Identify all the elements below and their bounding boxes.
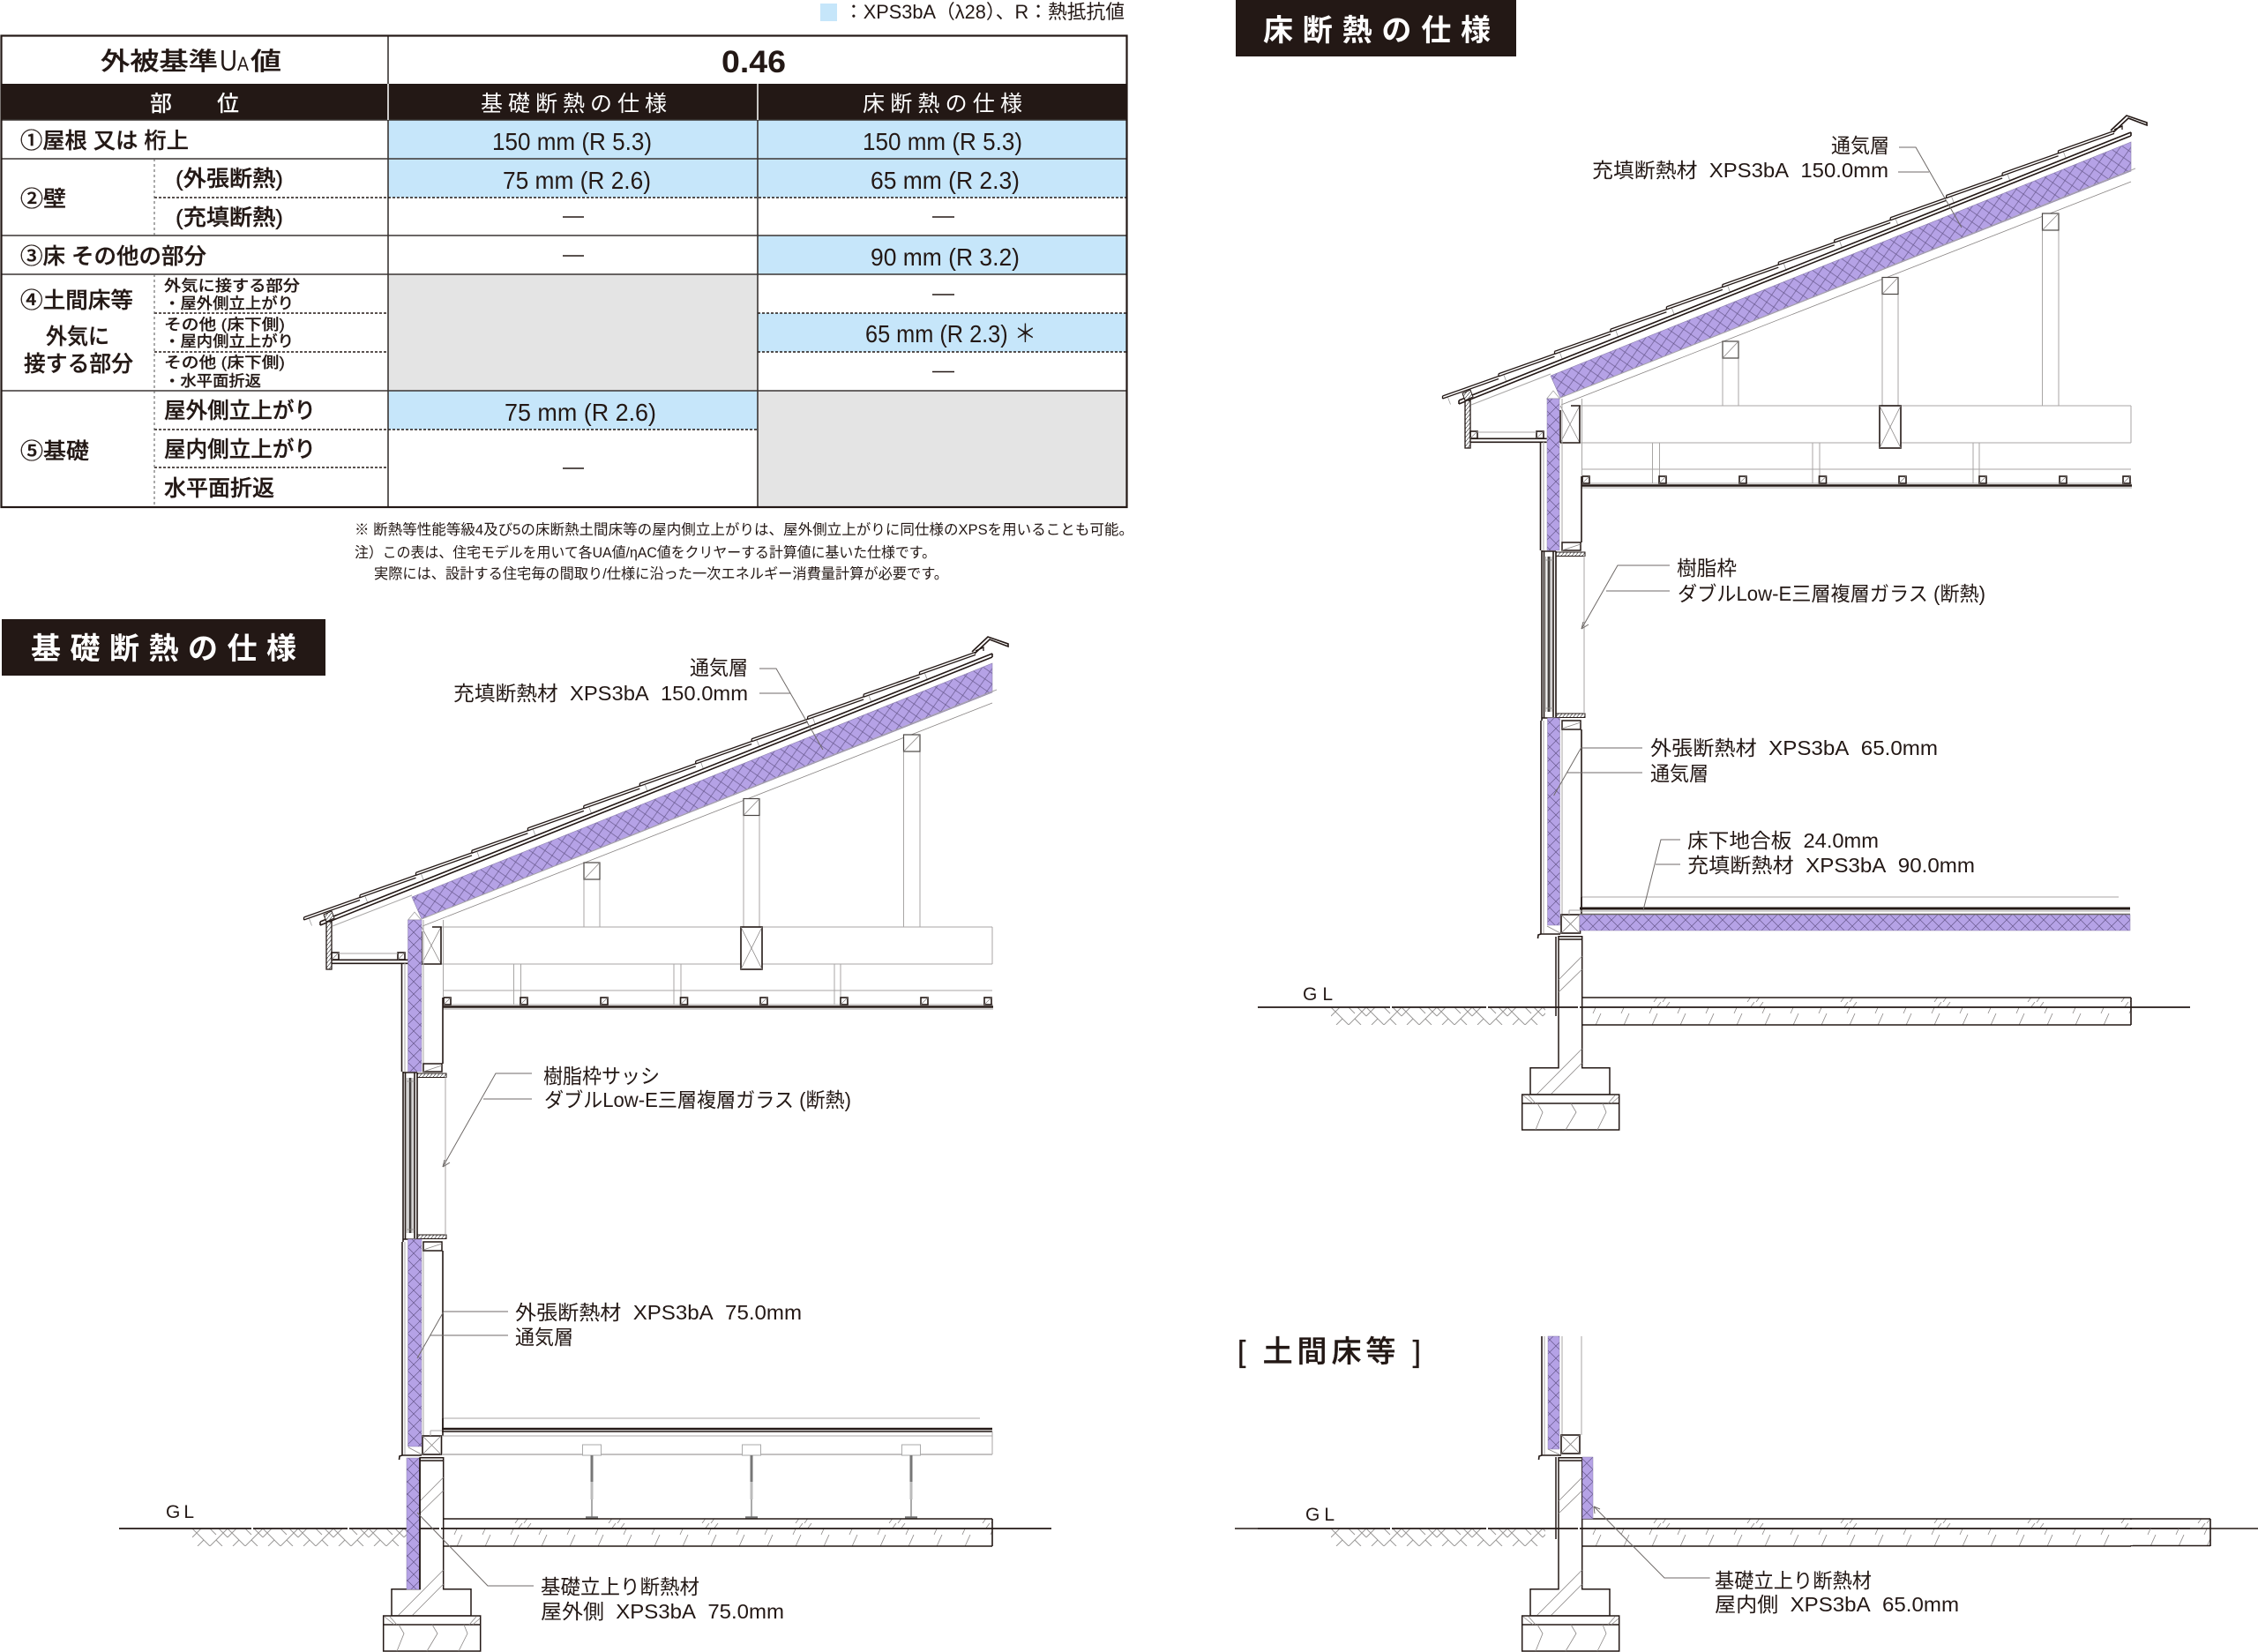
row labels: 屋内側立上がり bbox=[164, 437, 316, 462]
row labels: ④土間床等 bbox=[20, 288, 133, 313]
callout: exterior wall insulation: 通気層 bbox=[1650, 762, 1708, 785]
wall insulation upper bbox=[407, 920, 422, 1072]
callout: floor insulation bbox=[1643, 829, 1975, 910]
callout: interior foundation insulation: 屋内側 XPS3bA 65.0mm bbox=[1715, 1593, 1959, 1616]
row labels: 接する部分 bbox=[24, 352, 133, 377]
heading: floor insulation: 床断熱の仕様 bbox=[1263, 14, 1491, 48]
wall insulation upper bbox=[1547, 399, 1559, 550]
foundation and slab bbox=[1258, 1458, 2190, 1651]
row labels: その他 (床下側) bbox=[164, 354, 285, 371]
table values: 150 mm (R 5.3) bbox=[863, 128, 1022, 155]
raised floor bbox=[430, 1429, 992, 1454]
callout: window: 樹脂枠サッシ bbox=[543, 1065, 660, 1088]
table footnotes: 注）この表は、住宅モデルを用いて各UA値/ηAC値をクリヤーする計算値に基いた仕様です。 bbox=[355, 543, 936, 561]
row labels: ①屋根 又は 桁上 bbox=[20, 129, 189, 153]
wall stub bbox=[1538, 1336, 1581, 1460]
callout: ventilation and roof insulation bbox=[1592, 134, 1962, 228]
row labels: ②壁 bbox=[20, 187, 66, 212]
legend: ：XPS3bA（λ28）、R：熱抵抗値 bbox=[844, 1, 1125, 23]
heading: earthen floor: [ 土間床等 ] bbox=[1237, 1335, 1421, 1369]
callout: window: ダブルLow-E三層複層ガラス (断熱) bbox=[544, 1088, 851, 1111]
table values: 75 mm (R 2.6) bbox=[503, 167, 651, 194]
callout: exterior wall insulation bbox=[417, 1301, 802, 1358]
drawing: floor insulation section bbox=[1258, 116, 2190, 1130]
roof and wall framing bbox=[303, 637, 1008, 1460]
table values: 90 mm (R 3.2) bbox=[871, 243, 1020, 271]
extension of slab and ground line bbox=[1235, 1519, 2258, 1546]
ground line label: G L bbox=[1303, 984, 1333, 1005]
table values bbox=[492, 128, 1036, 468]
table footnotes: ※ 断熱等性能等級4及び5の床断熱土間床等の屋内側立上がりは、屋外側立上がりに同仕様のXPSを用いることも可能。 bbox=[355, 521, 1133, 538]
callout: ventilation and roof insulation: 通気層 bbox=[1831, 134, 1889, 157]
table values: 150 mm (R 5.3) bbox=[492, 128, 652, 155]
foundation and slab bbox=[1258, 937, 2190, 1130]
callout: exterior wall insulation: 外張断熱材 XPS3bA 65.0mm bbox=[1650, 736, 1938, 759]
callout: exterior wall insulation: 通気層 bbox=[515, 1326, 573, 1349]
heading: foundation insulation: 基礎断熱の仕様 bbox=[31, 632, 296, 666]
callout: window: ダブルLow-E三層複層ガラス (断熱) bbox=[1678, 582, 1985, 605]
table header row: 位 bbox=[217, 92, 239, 116]
row: UA value: 0.46 bbox=[722, 45, 786, 79]
row: UA value bbox=[101, 44, 786, 79]
drawing: earthen floor section bbox=[1235, 1336, 2258, 1651]
row labels: (外張断熱) bbox=[176, 167, 283, 191]
row labels: その他 (床下側) bbox=[164, 316, 285, 333]
row labels: ③床 その他の部分 bbox=[20, 244, 206, 269]
ground line label: G L bbox=[1305, 1505, 1335, 1525]
row labels: ⑤基礎 bbox=[20, 439, 89, 464]
callout: window bbox=[443, 1065, 851, 1167]
callout: interior foundation insulation bbox=[1594, 1506, 1959, 1616]
foundation insulation bbox=[407, 1458, 420, 1589]
table values: 65 mm (R 2.3) bbox=[871, 167, 1020, 194]
callout: interior foundation insulation: 基礎立上り断熱材 bbox=[1715, 1569, 1872, 1592]
table footnotes bbox=[355, 521, 1133, 582]
foundation wall edge bbox=[419, 1458, 421, 1589]
insulation specification table bbox=[2, 35, 1127, 507]
callout: floor insulation: 充填断熱材 XPS3bA 90.0mm bbox=[1687, 854, 1975, 877]
foundation and slab bbox=[119, 1458, 1051, 1651]
foundation flashing bbox=[1555, 937, 1557, 1016]
ground line label: G L bbox=[166, 1502, 194, 1522]
row: UA value: U bbox=[220, 44, 237, 77]
callout: exterior wall insulation: 外張断熱材 XPS3bA 75.0mm bbox=[515, 1301, 802, 1324]
interior foundation insulation bbox=[1582, 1457, 1593, 1519]
row labels: ・屋内側立上がり bbox=[164, 333, 294, 350]
row labels: 外気に接する部分 bbox=[164, 277, 301, 295]
insulated floor bbox=[1569, 908, 2130, 931]
foundation flashing bbox=[1555, 1457, 1557, 1539]
row labels: 屋外側立上がり bbox=[164, 399, 316, 423]
table values: 65 mm (R 2.3) ＊ bbox=[865, 320, 1036, 348]
callout: floor insulation: 床下地合板 24.0mm bbox=[1687, 829, 1879, 852]
row: UA value: 外被基準 bbox=[101, 48, 218, 75]
callout: foundation insulation: 屋外側 XPS3bA 75.0mm bbox=[541, 1600, 784, 1623]
table header row: 基礎断熱の仕様 bbox=[481, 92, 667, 116]
roof and wall framing bbox=[1443, 116, 2147, 938]
callout: ventilation and roof insulation bbox=[453, 656, 823, 750]
callout: ventilation and roof insulation: 充填断熱材 XPS3bA 150.0mm bbox=[1592, 159, 1888, 182]
drawing: foundation insulation section bbox=[119, 637, 1051, 1651]
table footnotes: 実際には、設計する住宅毎の間取り/仕様に沿った一次エネルギー消費量計算が必要です。 bbox=[374, 565, 948, 582]
heading: foundation insulation bbox=[2, 619, 325, 676]
table header row: 床断熱の仕様 bbox=[863, 92, 1022, 116]
callout: ventilation and roof insulation: 充填断熱材 XPS3bA 150.0mm bbox=[453, 682, 748, 705]
wall insulation lower bbox=[407, 1239, 422, 1446]
callout: window bbox=[1581, 557, 1985, 629]
table header row: 部 bbox=[150, 92, 172, 116]
row labels: ・屋外側立上がり bbox=[164, 295, 294, 312]
row labels: 外気に bbox=[46, 325, 109, 349]
heading: floor insulation bbox=[1236, 0, 1516, 56]
row labels: (充填断熱) bbox=[176, 206, 283, 230]
table header row bbox=[150, 92, 1022, 116]
row labels: 水平面折返 bbox=[164, 476, 274, 501]
callout: foundation insulation bbox=[417, 1513, 784, 1623]
row labels bbox=[20, 129, 316, 501]
callout: ventilation and roof insulation: 通気層 bbox=[690, 656, 748, 679]
floor pedestals bbox=[582, 1445, 921, 1517]
row: UA value: A bbox=[237, 53, 249, 75]
callout: foundation insulation: 基礎立上り断熱材 bbox=[541, 1575, 699, 1598]
wall insulation lower bbox=[1547, 718, 1559, 925]
table values: 75 mm (R 2.6) bbox=[505, 399, 656, 426]
row labels: ・水平面折返 bbox=[164, 372, 261, 390]
row: UA value: 値 bbox=[250, 48, 281, 75]
callout: exterior wall insulation bbox=[1554, 736, 1938, 796]
callout: window: 樹脂枠 bbox=[1677, 557, 1737, 579]
